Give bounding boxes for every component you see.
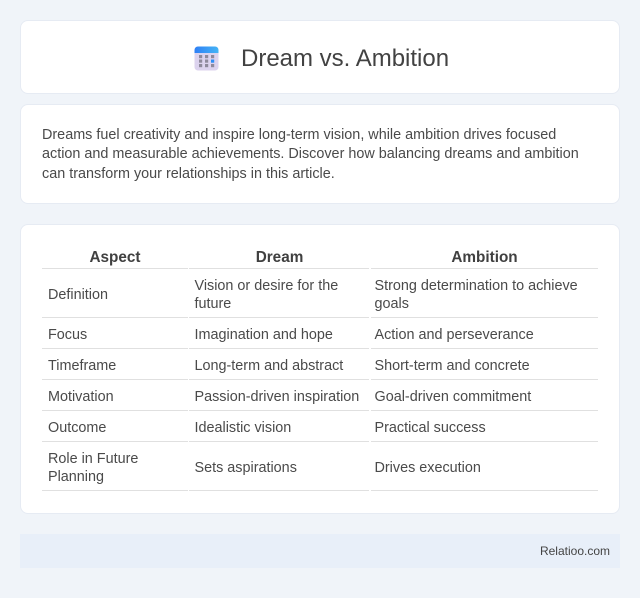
row: focus (48, 327, 534, 343)
row: definition: Vision or desire for the (194, 278, 338, 294)
row: focus: Action and perseverance (374, 327, 534, 343)
row: motivation: Goal-driven commitment (374, 389, 531, 405)
row: role in future planning (48, 451, 481, 485)
row: motivation (48, 389, 532, 405)
row: timeframe: Long-term and abstract (194, 358, 343, 374)
column headings: Aspect (89, 249, 140, 266)
panel: title card (20, 20, 620, 94)
row: timeframe (48, 358, 530, 374)
row: outcome: Practical success (374, 420, 486, 436)
row: definition: future (194, 296, 231, 312)
row: focus: Focus (48, 327, 87, 343)
column headings: Dream (256, 249, 303, 266)
intro text (42, 126, 579, 182)
column headings: Ambition (451, 249, 518, 266)
row: role in future planning: Planning (48, 469, 104, 485)
row: focus: Imagination and hope (194, 327, 333, 343)
table (89, 249, 518, 266)
row: outcome: Outcome (48, 420, 106, 436)
row: motivation: Motivation (48, 389, 114, 405)
row: role in future planning: Drives execution (374, 460, 481, 476)
column headings (89, 249, 518, 266)
panel: introduction (20, 104, 620, 204)
intro text: Dreams fuel creativity and inspire long-term vision, while ambition drives focused (42, 126, 556, 142)
row: role in future planning: Role in Future (48, 451, 138, 467)
row: outcome: Idealistic vision (194, 420, 291, 436)
row: role in future planning: Sets aspirations (194, 460, 297, 476)
intro text: can transform your relationships in this article. (42, 166, 335, 182)
row: timeframe: Timeframe (48, 358, 116, 374)
row: definition: Definition (48, 287, 108, 303)
title: Dream vs. Ambition (241, 45, 449, 72)
row: definition: goals (374, 296, 409, 312)
row: definition (48, 278, 578, 312)
footer bar (20, 534, 620, 568)
icon: calendar (194, 46, 218, 70)
row: outcome (48, 420, 486, 436)
row: timeframe: Short-term and concrete (374, 358, 530, 374)
panel: comparison table (20, 224, 620, 514)
footer credit: Relatioo.com (540, 544, 610, 558)
intro text: action and measurable achievements. Discover how balancing dreams and ambition (42, 146, 579, 162)
row: definition: Strong determination to achieve (374, 278, 578, 294)
row: motivation: Passion-driven inspiration (194, 389, 359, 405)
